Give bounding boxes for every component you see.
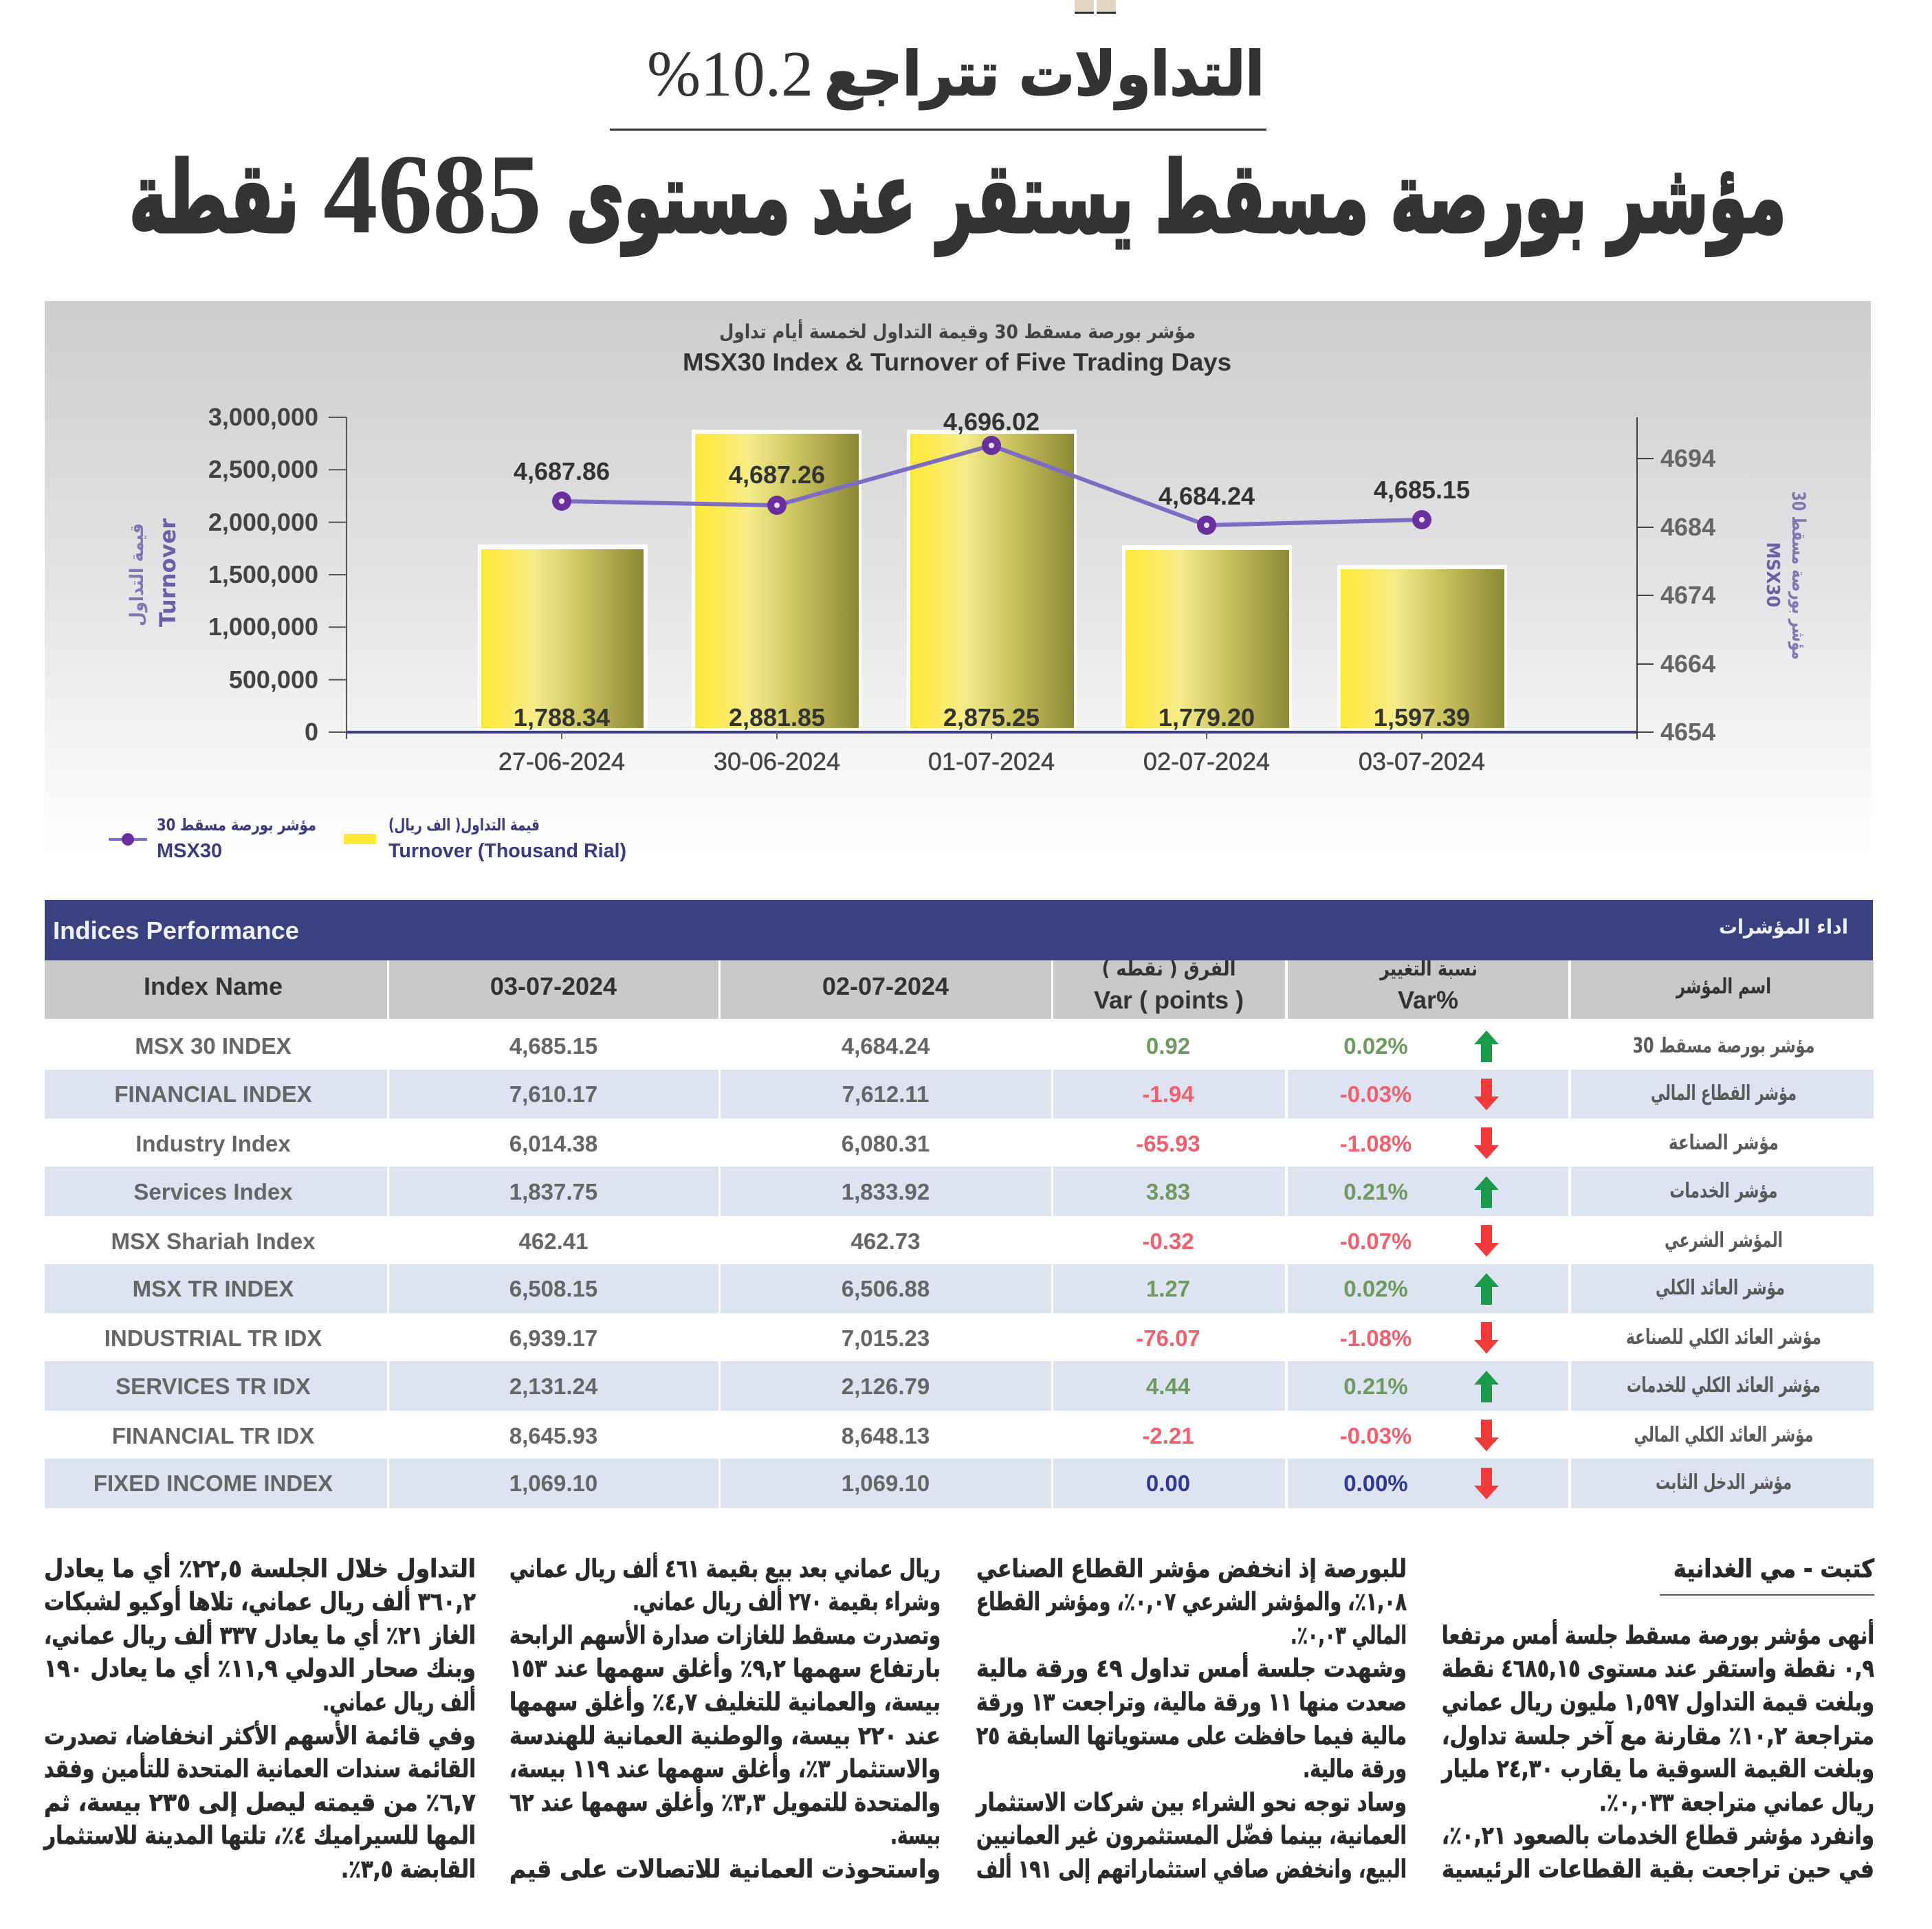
bar: 30-06-2024: 2,881.85 [729, 703, 825, 731]
row: FINANCIAL INDEX [45, 1070, 1874, 1118]
bar: 03-07-2024: 1,597.39 [1374, 703, 1470, 731]
legend [109, 815, 626, 862]
table title bar: اداء المؤشرات [1719, 915, 1848, 938]
article column 2: المالي ٠,٠٣٪. [1291, 1622, 1407, 1650]
table header labels row: Index Name [144, 972, 283, 1000]
article column 3: وتصدرت مسقط للغازات صدارة الأسهم الرابحة [509, 1620, 941, 1650]
table title bar: Indices Performance [53, 916, 299, 945]
article column 1: ٠,٩ نقطة واستقر عند مستوى ٤٦٨٥,١٥ نقطة [1442, 1655, 1874, 1683]
left axis: 1,500,000 [208, 560, 318, 588]
table header labels row: 02-07-2024 [822, 972, 949, 1000]
line series: MSX30: 4,687.26 [729, 461, 825, 489]
row: FINANCIAL INDEX: 7,610.17 [509, 1081, 597, 1107]
row: MSX Shariah Index: المؤشر الشرعي [1665, 1228, 1783, 1253]
article column 2: ورقة مالية. [1303, 1755, 1407, 1783]
panel: chart [45, 301, 1871, 862]
article column 3: والمتحدة للتمويل ٣,٣٪ وأغلق سهمها عند ٦٢ [509, 1786, 941, 1817]
left axis title [127, 518, 181, 627]
article column 3: واستحوذت العمانية للاتصالات على قيم [509, 1855, 941, 1884]
row: MSX 30 INDEX: 4,685.15 [509, 1033, 597, 1059]
article column 4 [43, 1552, 476, 1884]
chart background [45, 301, 1871, 855]
right axis title: مؤشر بورصة مسقط 30 [1788, 491, 1809, 660]
line series: MSX30: 4,687.86 [514, 457, 610, 485]
row: MSX Shariah Index: -0.07% [1340, 1228, 1412, 1254]
row: FINANCIAL TR IDX [112, 1420, 1814, 1451]
bar: 01-07-2024: 2,875.25 [943, 703, 1040, 731]
row: INDUSTRIAL TR IDX: -76.07 [1136, 1325, 1200, 1351]
bar: 27-06-2024 [478, 544, 648, 731]
row: MSX Shariah Index: -0.32 [1142, 1228, 1194, 1254]
row: MSX 30 INDEX: 0.02% [1343, 1033, 1408, 1059]
article column 3: والاستثمار ٣٪، وأغلق سهمها عند ١١٩ بيسة، [509, 1752, 941, 1783]
row: MSX TR INDEX: 6,508.15 [509, 1276, 597, 1301]
row: Services Index: 0.21% [1343, 1179, 1408, 1204]
left axis [208, 403, 347, 746]
legend: مؤشر بورصة مسقط 30 [157, 815, 316, 835]
article column 4: ألف ريال عماني. [322, 1686, 476, 1717]
table header labels row: اسم المؤشر [1676, 974, 1771, 999]
right axis [1637, 417, 1715, 746]
left axis: 2,500,000 [208, 455, 318, 483]
article column 2: البيع، وانخفض صافي استثماراتهم إلى ١٩١ ألف [976, 1853, 1407, 1884]
decorative top icon [1075, 0, 1116, 14]
row: MSX 30 INDEX: MSX 30 INDEX [135, 1033, 292, 1059]
line series: MSX30 [514, 408, 1470, 535]
row: FINANCIAL INDEX: مؤشر القطاع المالي [1651, 1081, 1797, 1105]
row: MSX 30 INDEX: 4,684.24 [842, 1033, 930, 1059]
article column 2: العمانية، بينما فضّل المستثمرون غير العمانيين [976, 1822, 1407, 1850]
row: Industry Index: 6,014.38 [509, 1131, 597, 1156]
row: MSX 30 INDEX [135, 1030, 1815, 1062]
subtitle: التداولات تتراجع [824, 38, 1264, 110]
line series: MSX30: 4,696.02 [943, 408, 1040, 436]
chart title: MSX30 Index & Turnover of Five Trading Days [683, 348, 1231, 376]
bar: 01-07-2024 [907, 430, 1077, 731]
right axis: 4674 [1660, 581, 1715, 609]
row: FIXED INCOME INDEX: 0.00 [1146, 1470, 1190, 1496]
article column 1 [1440, 1619, 1874, 1884]
bar: 30-06-2024 [692, 430, 861, 731]
table title bar [45, 900, 1873, 960]
x axis: 02-07-2024 [1143, 747, 1270, 775]
row: MSX 30 INDEX: مؤشر بورصة مسقط 30 [1632, 1034, 1815, 1058]
article column 4: ٣٦٠,٢ ألف ريال عماني، تلاها أوكيو لشبكات [44, 1585, 476, 1616]
article column 4: القائمة سندات العمانية المتحدة للتأمين وفقد [44, 1752, 476, 1783]
main title: 4685 [323, 131, 542, 257]
bar: 27-06-2024: 1,788.34 [514, 703, 610, 731]
table header labels row [45, 957, 1874, 1019]
table header labels row: نسبة التغيير [1379, 957, 1478, 980]
x axis [347, 731, 1637, 775]
line series: MSX30: 4,685.15 [1374, 476, 1470, 504]
article column 3: ريال عماني بعد بيع بقيمة ٤٦١ ألف ريال عماني [509, 1552, 941, 1583]
bar: 03-07-2024 [1337, 565, 1507, 731]
article column 1: ريال عماني متراجعة ٠,٠٣٣٪. [1599, 1789, 1874, 1817]
article column 2: ١,٠٨٪، والمؤشر الشرعي ٠,٠٧٪، ومؤشر القطاع [976, 1588, 1407, 1616]
row: MSX Shariah Index [111, 1225, 1783, 1257]
row: Industry Index [135, 1127, 1779, 1159]
row: Services Index: Services Index [133, 1179, 293, 1204]
row: INDUSTRIAL TR IDX: 7,015.23 [842, 1325, 930, 1351]
row: MSX TR INDEX: 1.27 [1146, 1276, 1190, 1301]
main title: نقطة [129, 142, 299, 255]
article column 4: المها للسيراميك ٤٪، تلتها المدينة للاستثمار [43, 1822, 476, 1850]
row: SERVICES TR IDX: 0.21% [1343, 1374, 1408, 1399]
row: FIXED INCOME INDEX: 1,069.10 [509, 1470, 597, 1496]
article column 3: وشراء بقيمة ٢٧٠ ألف ريال عماني. [633, 1585, 941, 1616]
row: MSX Shariah Index: MSX Shariah Index [111, 1228, 316, 1254]
article column 1: في حين تراجعت بقية القطاعات الرئيسية [1442, 1855, 1874, 1884]
row: FIXED INCOME INDEX: 0.00% [1343, 1470, 1408, 1496]
right axis: 4664 [1660, 650, 1715, 678]
right axis: 4654 [1660, 718, 1715, 746]
row: Services Index: 1,833.92 [842, 1179, 930, 1204]
row: FINANCIAL INDEX: -1.94 [1142, 1081, 1194, 1107]
left axis title: Turnover [155, 518, 181, 627]
row: SERVICES TR IDX [45, 1361, 1874, 1411]
row: SERVICES TR IDX: 4.44 [1146, 1374, 1191, 1399]
bar: 02-07-2024 [1122, 545, 1292, 731]
row: FINANCIAL TR IDX: مؤشر العائد الكلي المالي [1634, 1423, 1814, 1447]
panel: indices performance table [45, 900, 1874, 1508]
article column 3: بارتفاع سهمها ٩,٢٪ وأغلق سهمها عند ١٥٣ [509, 1652, 941, 1683]
row: Industry Index: -1.08% [1340, 1131, 1412, 1156]
right axis title [1762, 491, 1809, 660]
row: SERVICES TR IDX: 2,126.79 [842, 1374, 930, 1399]
x axis: 03-07-2024 [1359, 747, 1485, 775]
row: INDUSTRIAL TR IDX: 6,939.17 [509, 1325, 597, 1351]
right axis title: MSX30 [1762, 542, 1783, 608]
legend: قيمة التداول( الف ريال) [388, 815, 540, 835]
row: FINANCIAL TR IDX: FINANCIAL TR IDX [112, 1423, 314, 1448]
row: FINANCIAL TR IDX: 8,645.93 [509, 1423, 597, 1448]
row: INDUSTRIAL TR IDX: مؤشر العائد الكلي للصناعة [1626, 1325, 1821, 1349]
row: FIXED INCOME INDEX: مؤشر الدخل الثابت [1656, 1470, 1792, 1495]
legend: Turnover (Thousand Rial) [388, 840, 626, 862]
article column 4: التداول خلال الجلسة ٢٢,٥٪ أي ما يعادل [44, 1552, 476, 1583]
row: SERVICES TR IDX: مؤشر العائد الكلي للخدمات [1627, 1374, 1821, 1398]
subtitle: %10.2 [647, 38, 813, 110]
left axis: 500,000 [229, 665, 318, 694]
left axis title: قيمة التداول [127, 523, 148, 626]
article column 3: بيسة، والعمانية للتغليف ٤,٧٪ وأغلق سهمها [509, 1686, 941, 1717]
chart title [683, 319, 1231, 376]
article column 4: القابضة ٣,٥٪. [341, 1855, 476, 1884]
article column 1: متراجعة ١٠,٢٪ مقارنة مع آخر جلسة تداول، [1442, 1720, 1874, 1750]
left axis: 1,000,000 [208, 613, 318, 641]
row: MSX TR INDEX: 6,506.88 [842, 1276, 930, 1301]
article column 4: ٦,٧٪ من قيمته ليصل إلى ٢٣٥ بيسة، ثم [44, 1789, 476, 1817]
row: Industry Index: 6,080.31 [842, 1131, 930, 1156]
table header labels row: الفرق ( نقطه ) [1101, 957, 1236, 980]
chart title: مؤشر بورصة مسقط 30 وقيمة التداول لخمسة أيام تداول [719, 319, 1196, 343]
row: Services Index: مؤشر الخدمات [1669, 1179, 1778, 1203]
row: FIXED INCOME INDEX: FIXED INCOME INDEX [94, 1470, 333, 1496]
row: MSX TR INDEX [45, 1264, 1874, 1313]
row: MSX 30 INDEX: 0.92 [1146, 1033, 1190, 1059]
row: MSX Shariah Index: 462.73 [851, 1228, 920, 1254]
right axis: 4694 [1660, 444, 1715, 472]
legend: MSX30 [157, 840, 222, 862]
row: INDUSTRIAL TR IDX: -1.08% [1340, 1325, 1412, 1351]
main title [129, 131, 1786, 257]
table header labels row: Var% [1398, 986, 1458, 1014]
row: FINANCIAL INDEX: 7,612.11 [842, 1081, 929, 1107]
x axis: 30-06-2024 [714, 747, 840, 775]
row: SERVICES TR IDX: 2,131.24 [509, 1374, 598, 1399]
article column 2: وشهدت جلسة أمس تداول ٤٩ ورقة مالية [976, 1652, 1407, 1683]
row: MSX TR INDEX: مؤشر العائد الكلي [1656, 1276, 1785, 1300]
row: Industry Index: Industry Index [135, 1131, 291, 1156]
row: INDUSTRIAL TR IDX [105, 1322, 1821, 1354]
row: FIXED INCOME INDEX: 1,069.10 [842, 1470, 930, 1496]
x axis: 01-07-2024 [928, 747, 1055, 775]
subtitle [610, 38, 1266, 131]
left axis: 3,000,000 [208, 403, 318, 431]
table header labels row: Var ( points ) [1094, 986, 1244, 1014]
row: MSX Shariah Index: 462.41 [519, 1228, 588, 1254]
article column 3: عند ٢٢٠ بيسة، والوطنية العمانية للهندسة [509, 1722, 941, 1750]
right axis: 4684 [1660, 513, 1715, 541]
row: INDUSTRIAL TR IDX: INDUSTRIAL TR IDX [105, 1325, 322, 1351]
article column 2: مالية فيما حافظت على مستوياتها السابقة ٢٥ [976, 1722, 1407, 1750]
row: MSX TR INDEX: 0.02% [1343, 1276, 1408, 1301]
article column 4: وبنك صحار الدولي ١١,٩٪ أي ما يعادل ١٩٠ [44, 1652, 476, 1683]
row: FIXED INCOME INDEX [45, 1459, 1874, 1508]
article column 2: صعدت منها ١١ ورقة مالية، وتراجعت ١٣ ورقة [976, 1688, 1407, 1717]
bar: 02-07-2024: 1,779.20 [1159, 703, 1255, 731]
article column 3: بيسة. [890, 1822, 941, 1850]
line series: MSX30: 4,684.24 [1159, 482, 1255, 510]
article column 4: وفي قائمة الأسهم الأكثر انخفاضا، تصدرت [44, 1720, 476, 1750]
article column 2 [975, 1555, 1407, 1884]
article column 2: وساد توجه نحو الشراء بين شركات الاستثمار [975, 1789, 1407, 1817]
row: Services Index [45, 1167, 1874, 1216]
article column 1: وبلغت قيمة التداول ١,٥٩٧ مليون ريال عماني [1442, 1688, 1874, 1717]
row: Industry Index: مؤشر الصناعة [1669, 1131, 1779, 1155]
left axis: 2,000,000 [208, 508, 318, 536]
row: SERVICES TR IDX: SERVICES TR IDX [116, 1374, 311, 1399]
row: MSX TR INDEX: MSX TR INDEX [133, 1276, 294, 1301]
row: Industry Index: -65.93 [1136, 1131, 1200, 1156]
x axis: 27-06-2024 [498, 747, 625, 775]
row: FINANCIAL TR IDX: -0.03% [1340, 1423, 1412, 1448]
row: Services Index: 1,837.75 [509, 1179, 597, 1204]
byline: كتبت - مي الغدانية [1673, 1555, 1874, 1583]
row: Services Index: 3.83 [1146, 1179, 1190, 1204]
row: FINANCIAL INDEX: FINANCIAL INDEX [114, 1081, 312, 1107]
article column 4: الغاز ٢١٪ أي ما يعادل ٣٣٧ ألف ريال عماني، [44, 1619, 476, 1650]
table header labels row: 03-07-2024 [490, 972, 617, 1000]
row: FINANCIAL TR IDX: 8,648.13 [842, 1423, 930, 1448]
left axis: 0 [305, 718, 318, 746]
article column 3 [509, 1552, 941, 1884]
article column 2: للبورصة إذ انخفض مؤشر القطاع الصناعي [976, 1555, 1407, 1583]
row: FINANCIAL INDEX: -0.03% [1340, 1081, 1412, 1107]
row: FINANCIAL TR IDX: -2.21 [1142, 1423, 1194, 1448]
